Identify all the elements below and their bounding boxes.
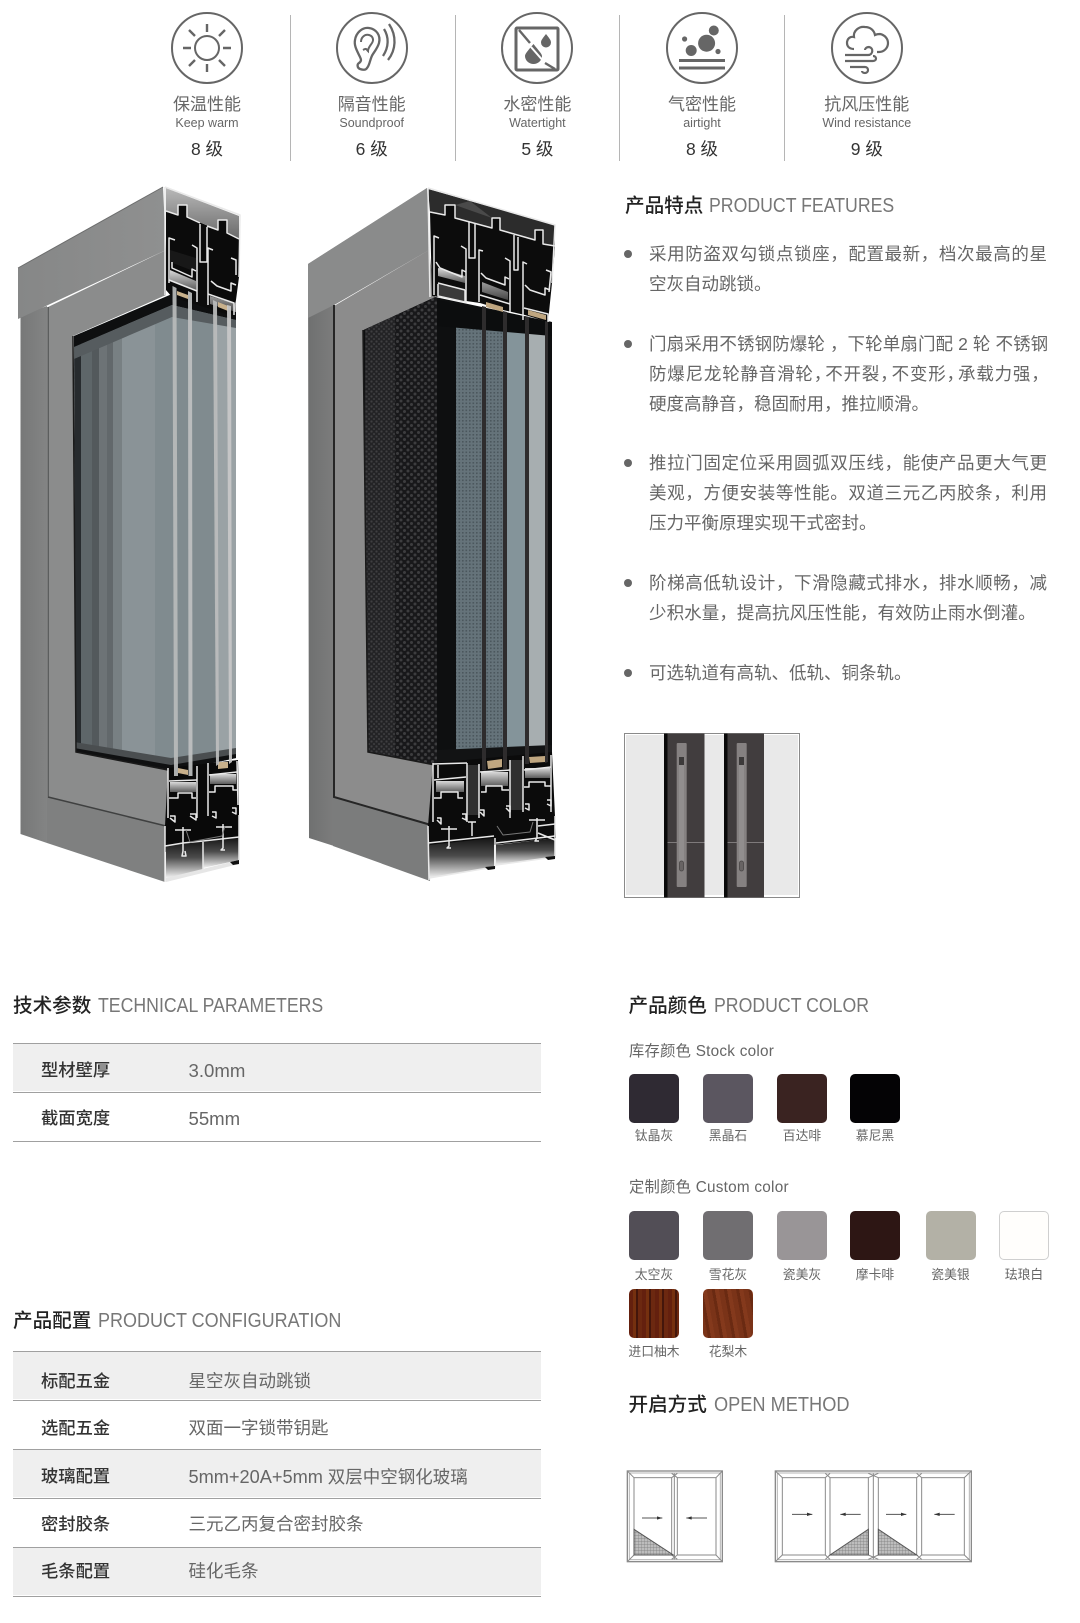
label: 瓷美银: 瓷美银 [931,1266,970,1282]
label: 瓷美灰: 瓷美灰 [783,1266,821,1282]
swatch: 珐琅白 [999,1211,1049,1260]
dark glass pane edges of right window [482,306,548,771]
heading: product color [628,995,869,1017]
label: Soundproof: Soundproof [339,116,404,130]
swatch: 瓷美灰 [777,1211,827,1260]
rating: wind resistance [822,12,911,159]
row: 选配五金 [41,1418,328,1438]
heading: technical parameters [13,995,323,1017]
heading english: PRODUCT COLOR [714,995,869,1017]
label: 黑晶石: 黑晶石 [709,1128,747,1143]
subheading: custom color: 定制颜色 Custom color [629,1179,789,1196]
icon: cloud and wind [831,12,903,84]
label: 百达啡: 百达啡 [783,1128,821,1143]
frame: sash top and side [334,250,435,825]
label: 保温性能: 保温性能 [173,95,241,114]
bullet 1 [624,244,1048,294]
heading: open method [628,1394,850,1416]
icon: sun [171,12,243,84]
label: 气密性能: 气密性能 [668,95,736,114]
rating: airtight [666,12,738,159]
heading chinese: 产品颜色 [628,995,707,1017]
bullet 5: 可选轨道有高轨、低轨、铜条轨。 [649,663,912,683]
glass pane edges of left window [172,286,232,776]
bottom cross-section of right window [428,752,556,880]
panel: open method [626,1394,972,1562]
row: 玻璃配置: 玻璃配置 [41,1466,110,1486]
diagrams: sliding door opening [626,1470,972,1562]
panel: product color [628,995,1049,1359]
swatch: 钛晶灰 [629,1074,679,1122]
door stile left [664,734,704,898]
panel: technical parameters [13,995,541,1142]
label: Keep warm: Keep warm [175,116,239,130]
row: 标配五金: 标配五金 [41,1371,110,1391]
row: 标配五金: 星空灰自动跳锁 [188,1371,311,1391]
row: 密封胶条 [41,1514,364,1534]
row: 型材壁厚 [13,1044,541,1091]
row: 选配五金: 双面一字锁带钥匙 [188,1418,328,1438]
label: 摩卡啡: 摩卡啡 [856,1266,894,1282]
row: 玻璃配置: 5mm+20A+5mm 双层中空钢化玻璃 [188,1467,468,1487]
bullet 2 [624,334,1050,414]
row: 型材壁厚: 型材壁厚 [41,1060,110,1080]
label: Watertight: Watertight [509,116,566,130]
value: 5 级: 5 级 [521,139,553,159]
label: 隔音性能: 隔音性能 [338,95,406,114]
rating: soundproof [336,12,408,159]
row: 标配五金 [13,1352,541,1399]
label: airtight: airtight [683,116,721,130]
top cross-section of left window [165,187,240,316]
bullet 3: 压力平衡原理实现干式密封。 [649,513,876,533]
subheading: stock color: 库存颜色 Stock color [629,1043,774,1060]
right window profile [308,188,560,881]
panel: product features [624,195,1050,683]
bullet 2: 硬度高静音，稳固耐用，推拉顺滑。 [649,394,929,414]
panel: product configuration [13,1310,541,1597]
row: 截面宽度: 截面宽度 [41,1108,110,1128]
diagram: four-panel door [775,1471,971,1562]
row: 毛条配置: 硅化毛条 [188,1561,258,1581]
label: 慕尼黑: 慕尼黑 [856,1128,894,1143]
label: 珐琅白: 珐琅白 [1005,1266,1043,1282]
rating: keep warm [171,12,243,159]
door stile right [724,734,764,898]
label: 抗风压性能: 抗风压性能 [824,95,909,114]
panel: performance ratings [171,12,911,161]
heading english: PRODUCT FEATURES [709,195,894,217]
row: 选配五金: 选配五金 [41,1418,110,1438]
label: 雪花灰: 雪花灰 [709,1266,747,1282]
bullet 4: 少积水量，提高抗风压性能，有效防止雨水倒灌。 [649,603,1036,623]
bullet 3: 推拉门固定位采用圆弧双压线，能使产品更大气更 [649,453,1048,473]
frame: outer jamb [20,306,47,843]
swatch: 瓷美银 [926,1211,976,1260]
heading chinese: 产品配置 [13,1310,91,1332]
heading english: OPEN METHOD [714,1394,850,1416]
rating: watertight [501,12,573,159]
bullet 1: 空灰自动跳锁。 [649,274,772,294]
bullet 3 [624,453,1048,533]
frame: sash top and side [48,250,171,826]
value: 6 级: 6 级 [356,139,388,159]
heading english: PRODUCT CONFIGURATION [98,1310,341,1332]
swatch: 太空灰 [629,1211,679,1260]
left window profile [18,187,240,882]
bullet 2: 门扇采用不锈钢防爆轮 ，下轮单扇门配 2 轮 不锈钢 [649,334,1048,354]
swatch: 雪花灰 [703,1211,753,1260]
swatch: 花梨木 [703,1289,753,1338]
row: 型材壁厚: 3.0mm [188,1060,245,1080]
row: 玻璃配置 [13,1450,541,1497]
label: 水密性能: 水密性能 [503,95,571,114]
label: 花梨木: 花梨木 [709,1344,747,1359]
swatch: 进口柚木 [628,1289,678,1338]
bullet 3: 美观，方便安装等性能。双道三元乙丙胶条，利用 [649,483,1048,503]
swatch: 黑晶石 [703,1074,753,1122]
swatch: 摩卡啡 [850,1211,900,1260]
top cross-section of right window [428,188,555,322]
glass and mesh of right window [360,290,560,780]
product images: window profile renders [18,186,556,882]
heading: product features [625,195,894,217]
row: 截面宽度: 55mm [188,1108,240,1128]
icon: water drops with slash [501,12,573,84]
row: 密封胶条: 密封胶条 [41,1514,110,1534]
bottom cross-section of left window [165,760,239,882]
bullet 2: 防爆尼龙轮静音滑轮，不开裂，不变形，承载力强， [649,364,1050,384]
heading chinese: 产品特点 [625,195,703,217]
swatch: 慕尼黑 [850,1074,900,1122]
image: door handle detail [624,733,800,898]
swatch: 百达啡 [777,1074,827,1122]
icon: air particles above lines [666,12,738,84]
value: 9 级: 9 级 [851,139,883,159]
row: 密封胶条: 三元乙丙复合密封胶条 [188,1514,364,1534]
frame: head [18,187,166,319]
icon: ear [336,12,408,84]
diagram: two-panel door [627,1471,722,1562]
row: 毛条配置 [13,1548,541,1595]
bullet 4 [624,573,1048,623]
frame: head and outer jamb [308,188,429,846]
label: 钛晶灰: 钛晶灰 [635,1128,673,1143]
value: 8 级: 8 级 [686,139,718,159]
bullet 4: 阶梯高低轨设计，下滑隐藏式排水，排水顺畅，减 [649,573,1048,593]
frame: sill [333,796,431,881]
row: 毛条配置: 毛条配置 [41,1561,110,1581]
label: 进口柚木: 进口柚木 [628,1344,680,1359]
row: 截面宽度 [41,1108,240,1128]
glass of left window [70,285,240,775]
label: 太空灰: 太空灰 [635,1266,673,1282]
bullet 1: 采用防盗双勾锁点锁座，配置最新，档次最高的星 [649,244,1048,264]
heading english: TECHNICAL PARAMETERS [98,995,323,1017]
label: Wind resistance: Wind resistance [822,116,911,130]
heading: product configuration [13,1310,341,1332]
heading chinese: 技术参数 [13,995,91,1017]
frame: sill [47,796,165,882]
heading chinese: 开启方式 [628,1394,707,1416]
value: 8 级: 8 级 [191,139,223,159]
